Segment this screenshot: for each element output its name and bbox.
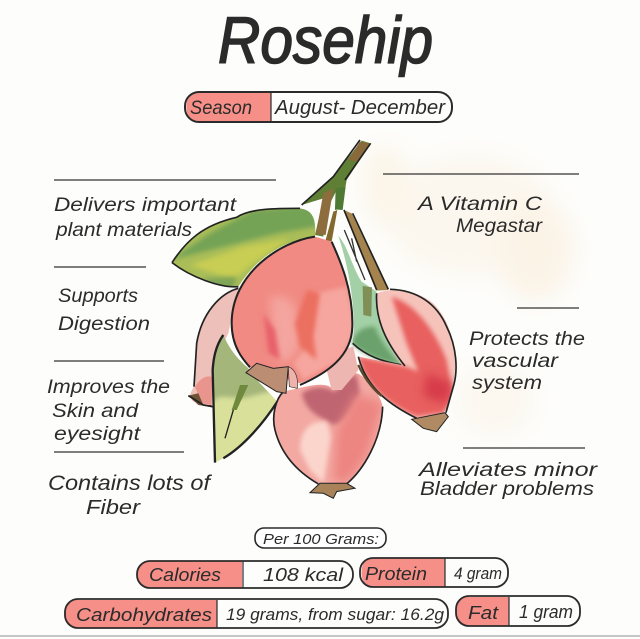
bottom hip (274, 347, 383, 498)
season pill (185, 92, 452, 122)
right benefit: bladder: Bladder problems (420, 479, 595, 500)
leaf lower (210, 333, 277, 463)
fat pill (456, 596, 580, 626)
fat pill: Fat (468, 603, 499, 623)
left benefit: fiber: Contains lots of (48, 472, 212, 495)
right benefit: vascular: vascular (472, 351, 559, 372)
protein pill: Protein (365, 564, 427, 584)
left benefit: plant materials: Delivers important (54, 195, 237, 216)
calories pill: Calories (149, 565, 221, 585)
right benefit: bladder: Alleviates minor (418, 460, 598, 481)
left benefit: skin and eyesight: Skin and (52, 401, 140, 422)
main hip (232, 237, 357, 393)
fat pill: 1 gram (519, 602, 573, 622)
left benefit: digestion (54, 267, 150, 335)
right hip (358, 289, 456, 432)
season pill: August- December (274, 97, 446, 119)
season pill: Season (190, 98, 252, 119)
right benefit: vitamin C: Megastar (456, 216, 543, 237)
sheet edge (0, 635, 640, 637)
carbohydrates pill: Carbohydrates (76, 605, 212, 625)
leaf behind right (338, 230, 402, 365)
left benefit: digestion: Supports (58, 286, 139, 307)
title: Rosehip (218, 3, 433, 77)
stem (302, 140, 388, 291)
left benefit: fiber: Fiber (86, 497, 142, 519)
left benefit: skin and eyesight: eyesight (54, 424, 141, 445)
left benefit: plant materials (54, 180, 276, 241)
left benefit: digestion: Digestion (58, 314, 150, 335)
left benefit: skin and eyesight (47, 361, 170, 445)
left benefit: skin and eyesight: Improves the (47, 377, 170, 398)
right benefit: bladder (418, 448, 598, 500)
illustration: rosehip branch (170, 140, 456, 498)
left benefit: plant materials: plant materials (55, 220, 193, 241)
per 100 grams label: Per 100 Grams: (263, 531, 379, 548)
right benefit: vascular (469, 308, 585, 394)
carbohydrates pill: 19 grams, from sugar: 16.2g (226, 605, 445, 624)
leaf top (170, 205, 320, 290)
left small hip (188, 288, 238, 407)
right benefit: vascular: system (472, 373, 542, 394)
right benefit: vitamin C (383, 174, 579, 237)
calories pill: 108 kcal (263, 565, 344, 585)
per 100 grams label (255, 528, 386, 548)
calories pill (137, 561, 353, 588)
background watercolor stain (363, 145, 573, 438)
right benefit: vascular: Protects the (469, 329, 585, 350)
left benefit: fiber (48, 452, 212, 519)
carbohydrates pill (64, 599, 448, 628)
protein pill (360, 558, 508, 587)
right benefit: vitamin C: A Vitamin C (417, 194, 542, 215)
protein pill: 4 gram (454, 564, 502, 583)
